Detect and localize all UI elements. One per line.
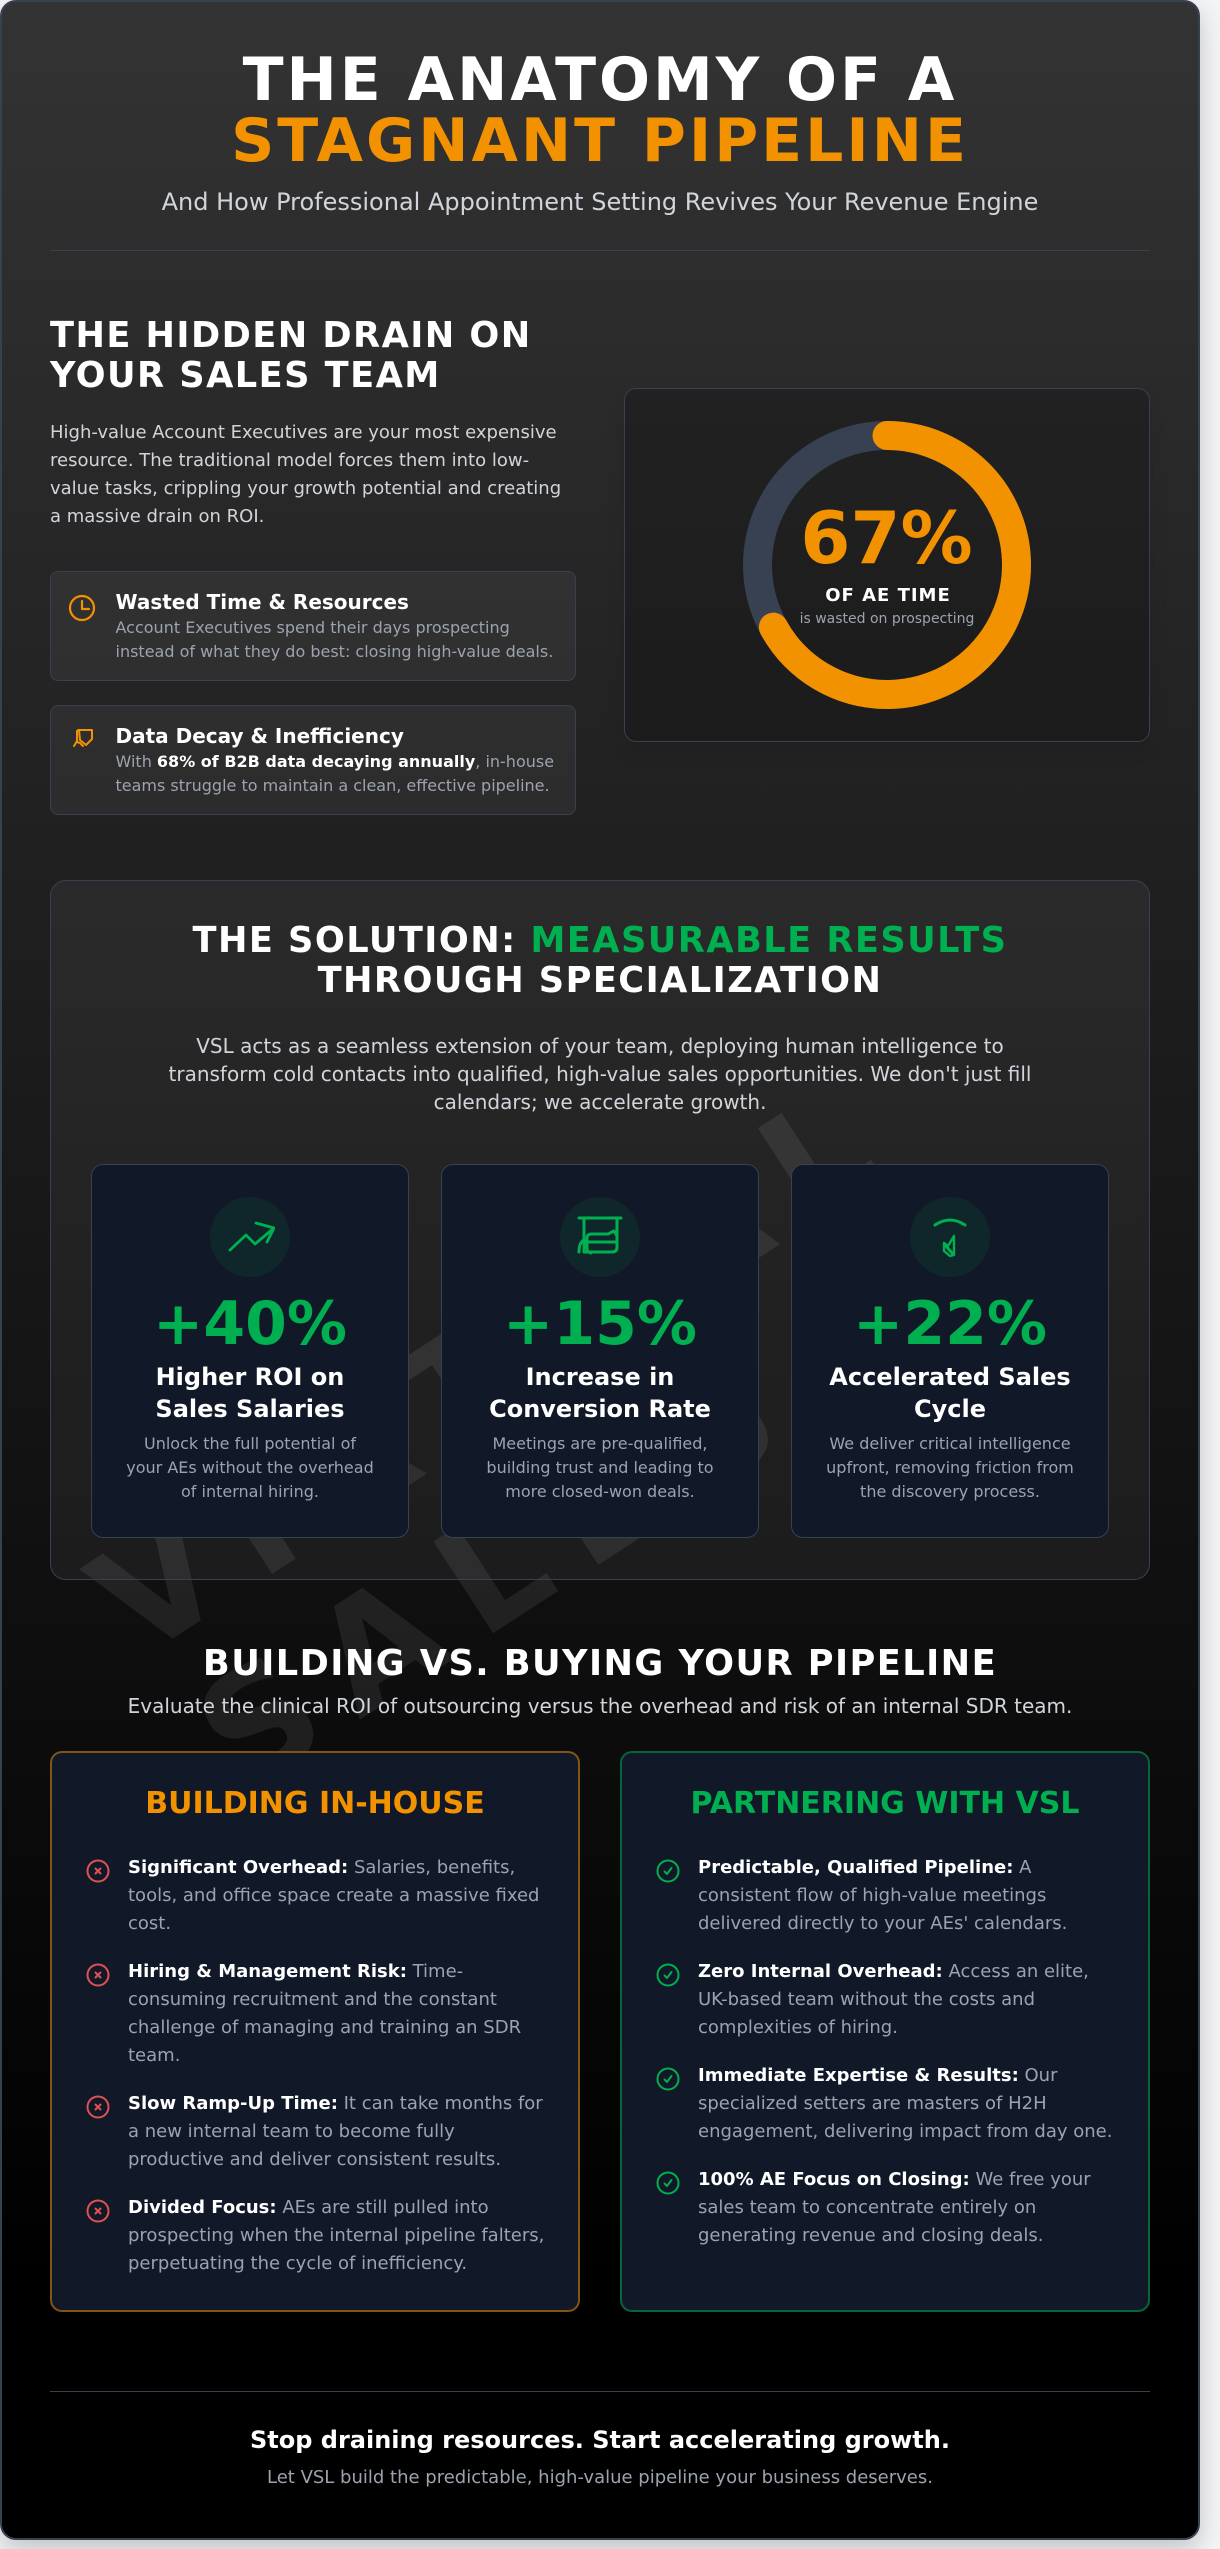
card: higher ROI	[91, 1164, 409, 1538]
text: hidden drain intro: a massive drain on ROI.	[50, 506, 264, 527]
item: predictable pipeline	[656, 1857, 1067, 1934]
heading: conversion rate: Conversion Rate	[489, 1395, 711, 1423]
text: sales cycle: We deliver critical intelligence	[829, 1434, 1071, 1453]
heading: conversion rate: Increase in	[526, 1363, 674, 1391]
item: AE focus: generating revenue and closing deals.	[698, 2225, 1044, 2246]
item: immediate expertise: Immediate Expertise & Results: Our	[698, 2065, 1058, 2086]
heading: wasted time: Wasted Time & Resources	[116, 590, 409, 614]
text: higher ROI: Unlock the full potential of	[144, 1434, 356, 1453]
footer subtext: Let VSL build the predictable, high-value pipeline your business deserves.	[267, 2467, 933, 2488]
label: wasted on prospecting: is wasted on prospecting	[800, 611, 974, 627]
icon: trending up	[210, 1197, 290, 1277]
heading: building vs buying: BUILDING VS. BUYING YOUR PIPELINE	[203, 1643, 997, 1684]
panel: building in-house	[50, 1751, 580, 2312]
item: slow ramp-up: productive and deliver consistent results.	[128, 2149, 501, 2170]
heading: partnering with VSL: PARTNERING WITH VSL	[691, 1786, 1079, 1821]
item: significant overhead: tools, and office space create a massive fixed	[128, 1885, 539, 1906]
item: predictable pipeline: Predictable, Qualified Pipeline: A	[698, 1857, 1032, 1878]
text: sales cycle	[826, 1434, 1074, 1501]
text: conversion rate: Meetings are pre-qualified,	[492, 1434, 708, 1453]
item: significant overhead: cost.	[128, 1913, 171, 1934]
item: zero overhead: Zero Internal Overhead: Access an elite,	[698, 1961, 1089, 1982]
heading: conversion rate	[489, 1363, 711, 1423]
text: wasted time: Account Executives spend their days prospecting	[116, 618, 510, 637]
item: zero overhead: UK-based team without the costs and	[698, 1989, 1035, 2010]
panel: partnering with VSL	[620, 1751, 1150, 2312]
item: hiring risk: consuming recruitment and the constant	[128, 1989, 497, 2010]
heading: solution: THE SOLUTION: MEASURABLE RESULTS	[193, 920, 1007, 961]
stat: +22%: +22%	[853, 1289, 1047, 1359]
item: zero overhead: complexities of hiring.	[698, 2017, 898, 2038]
item: hiring risk	[86, 1961, 521, 2066]
item: hiring risk: Hiring & Management Risk: Time-	[128, 1961, 463, 1982]
heading: sales cycle	[829, 1363, 1071, 1423]
item: immediate expertise: engagement, delivering impact from day one.	[698, 2121, 1112, 2142]
text: solution intro	[168, 1034, 1031, 1114]
item: divided focus	[86, 2197, 544, 2274]
text: hidden drain intro	[50, 422, 561, 527]
text: wasted time: instead of what they do best: closing high-value deals.	[116, 642, 553, 661]
label: of AE time: OF AE TIME	[825, 585, 951, 606]
item: slow ramp-up: a new internal team to become fully	[128, 2121, 455, 2142]
donut chart	[743, 421, 1031, 709]
item: predictable pipeline: delivered directly to your AEs' calendars.	[698, 1913, 1067, 1934]
item: immediate expertise: specialized setters are masters of H2H	[698, 2093, 1047, 2114]
text: solution intro: transform cold contacts into qualified, high-value sales opportunities. We don't just fill	[168, 1062, 1031, 1086]
watermark: SALES	[168, 1309, 833, 1826]
item: predictable pipeline: consistent flow of high-value meetings	[698, 1885, 1046, 1906]
item: divided focus: Divided Focus: AEs are still pulled into	[128, 2197, 489, 2218]
heading: sales cycle: Accelerated Sales	[829, 1363, 1071, 1391]
title: THE ANATOMY OF A	[243, 45, 957, 115]
icon: funnel beaker	[560, 1197, 640, 1277]
text: higher ROI	[126, 1434, 374, 1501]
text: conversion rate: building trust and leading to	[486, 1458, 714, 1477]
item: AE focus	[656, 2169, 1091, 2246]
heading: data decay: Data Decay & Inefficiency	[116, 724, 404, 748]
item: AE focus: 100% AE Focus on Closing: We free your	[698, 2169, 1091, 2190]
text: hidden drain intro: value tasks, crippling your growth potential and creating	[50, 478, 561, 499]
text: data decay: With 68% of B2B data decaying annually, in-house	[116, 752, 554, 771]
text: data decay	[116, 752, 554, 795]
item: significant overhead: Significant Overhead: Salaries, benefits,	[128, 1857, 515, 1878]
heading: hidden drain	[50, 315, 532, 396]
card: sales cycle	[791, 1164, 1109, 1538]
item: hiring risk: challenge of managing and training an SDR	[128, 2017, 521, 2038]
footer headline: Stop draining resources. Start accelerating growth.	[250, 2426, 950, 2454]
text: conversion rate: more closed-won deals.	[505, 1482, 695, 1501]
panel: donut chart	[624, 388, 1150, 742]
icon: data decay	[73, 729, 93, 747]
panel: solution	[50, 880, 1150, 1580]
icon: clock	[68, 594, 96, 622]
watermark: VIRTUAL	[63, 1043, 931, 1691]
stat: +15%: +15%	[503, 1289, 697, 1359]
text: higher ROI: of internal hiring.	[181, 1482, 319, 1501]
panel: wasted time	[50, 571, 576, 681]
stat: +40%: +40%	[153, 1289, 347, 1359]
text: wasted time	[116, 618, 553, 661]
text: solution intro: VSL acts as a seamless extension of your team, deploying human intelligence to	[196, 1034, 1004, 1058]
item: slow ramp-up: Slow Ramp-Up Time: It can take months for	[128, 2093, 543, 2114]
heading: higher ROI: Higher ROI on	[156, 1363, 344, 1391]
item: zero overhead	[656, 1961, 1089, 2038]
text: higher ROI: your AEs without the overhead	[126, 1458, 374, 1477]
item: immediate expertise	[656, 2065, 1112, 2142]
text: sales cycle: the discovery process.	[860, 1482, 1040, 1501]
heading: building in-house: BUILDING IN-HOUSE	[145, 1786, 485, 1821]
text: solution intro: calendars; we accelerate growth.	[434, 1090, 766, 1114]
text: hidden drain intro: resource. The traditional model forces them into low-	[50, 450, 529, 471]
heading: solution	[192, 920, 1007, 1001]
title: STAGNANT PIPELINE	[231, 106, 969, 176]
text: data decay: teams struggle to maintain a clean, effective pipeline.	[116, 776, 550, 795]
text: hidden drain intro: High-value Account Executives are your most expensive	[50, 422, 557, 443]
item: significant overhead	[86, 1857, 539, 1934]
heading: hidden drain: THE HIDDEN DRAIN ON	[50, 315, 532, 356]
icon: speed gauge	[910, 1197, 990, 1277]
heading: sales cycle: Cycle	[914, 1395, 986, 1423]
item: AE focus: sales team to concentrate entirely on	[698, 2197, 1036, 2218]
item: divided focus: perpetuating the cycle of inefficiency.	[128, 2253, 467, 2274]
subtitle: And How Professional Appointment Setting Revives Your Revenue Engine	[162, 188, 1038, 216]
card: conversion rate	[441, 1164, 759, 1538]
heading: higher ROI	[155, 1363, 345, 1423]
text: conversion rate	[486, 1434, 714, 1501]
heading: higher ROI: Sales Salaries	[155, 1395, 345, 1423]
text: sales cycle: upfront, removing friction from	[826, 1458, 1074, 1477]
panel: data decay	[50, 705, 576, 815]
text: building vs buying intro: Evaluate the clinical ROI of outsourcing versus the overhead and risk of an internal SDR team.	[128, 1694, 1072, 1718]
item: slow ramp-up	[86, 2093, 543, 2170]
stat: 67%: 67%	[800, 496, 973, 580]
item: hiring risk: team.	[128, 2045, 180, 2066]
title	[231, 45, 969, 176]
item: divided focus: prospecting when the internal pipeline falters,	[128, 2225, 544, 2246]
heading: hidden drain: YOUR SALES TEAM	[50, 355, 441, 396]
heading: solution: THROUGH SPECIALIZATION	[318, 960, 882, 1001]
